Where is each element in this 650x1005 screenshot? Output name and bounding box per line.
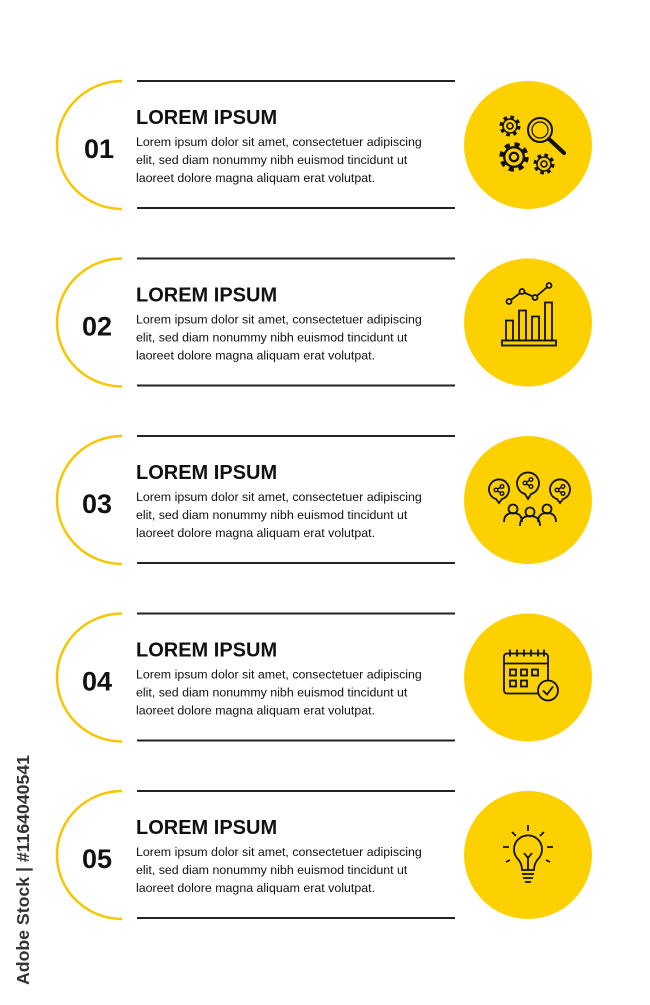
title 5: LOREM IPSUM <box>136 817 277 839</box>
body 2: laoreet dolore magna aliquam erat volutpat. <box>136 348 375 362</box>
body 1: elit, sed diam nonummy nibh euismod tincidunt ut <box>136 153 408 167</box>
body 4: elit, sed diam nonummy nibh euismod tincidunt ut <box>136 686 408 700</box>
title 3: LOREM IPSUM <box>136 462 277 484</box>
number 05: 05 <box>82 844 112 874</box>
body 1: Lorem ipsum dolor sit amet, consectetuer adipiscing <box>136 135 422 149</box>
body 2: Lorem ipsum dolor sit amet, consectetuer adipiscing <box>136 312 422 326</box>
title 1: LOREM IPSUM <box>136 107 277 129</box>
body 4: laoreet dolore magna aliquam erat volutpat. <box>136 704 375 718</box>
icon circle 3: people sharing <box>464 436 592 564</box>
body 5: laoreet dolore magna aliquam erat volutpat. <box>136 881 375 895</box>
body 5: Lorem ipsum dolor sit amet, consectetuer adipiscing <box>136 845 422 859</box>
body 1: laoreet dolore magna aliquam erat volutpat. <box>136 171 375 185</box>
row 4 <box>57 614 592 742</box>
body 2: elit, sed diam nonummy nibh euismod tincidunt ut <box>136 330 408 344</box>
body 3: laoreet dolore magna aliquam erat volutpat. <box>136 526 375 540</box>
icon circle 2: bar chart <box>464 258 592 386</box>
row 1 <box>57 81 592 209</box>
body 4: Lorem ipsum dolor sit amet, consectetuer adipiscing <box>136 668 422 682</box>
row 3 <box>57 436 592 564</box>
title 4: LOREM IPSUM <box>136 640 277 662</box>
number 03: 03 <box>82 489 112 519</box>
body 5: elit, sed diam nonummy nibh euismod tincidunt ut <box>136 863 408 877</box>
arc 5 <box>57 791 122 919</box>
watermark side text: Adobe Stock | #1164040541 <box>13 755 33 985</box>
arc 2 <box>57 258 122 386</box>
arc 1 <box>57 81 122 209</box>
icon circle 5: light bulb <box>464 791 592 919</box>
icon circle 1: gears and magnifier <box>464 81 592 209</box>
body 3: elit, sed diam nonummy nibh euismod tincidunt ut <box>136 508 408 522</box>
number 01: 01 <box>84 134 114 164</box>
arc 3 <box>57 436 122 564</box>
row 5 <box>57 791 592 919</box>
number 02: 02 <box>82 312 112 342</box>
arc 4 <box>57 614 122 742</box>
title 2: LOREM IPSUM <box>136 284 277 306</box>
icon circle 4: calendar <box>464 614 592 742</box>
row 2 <box>57 258 592 386</box>
number 04: 04 <box>82 666 112 696</box>
body 3: Lorem ipsum dolor sit amet, consectetuer adipiscing <box>136 490 422 504</box>
